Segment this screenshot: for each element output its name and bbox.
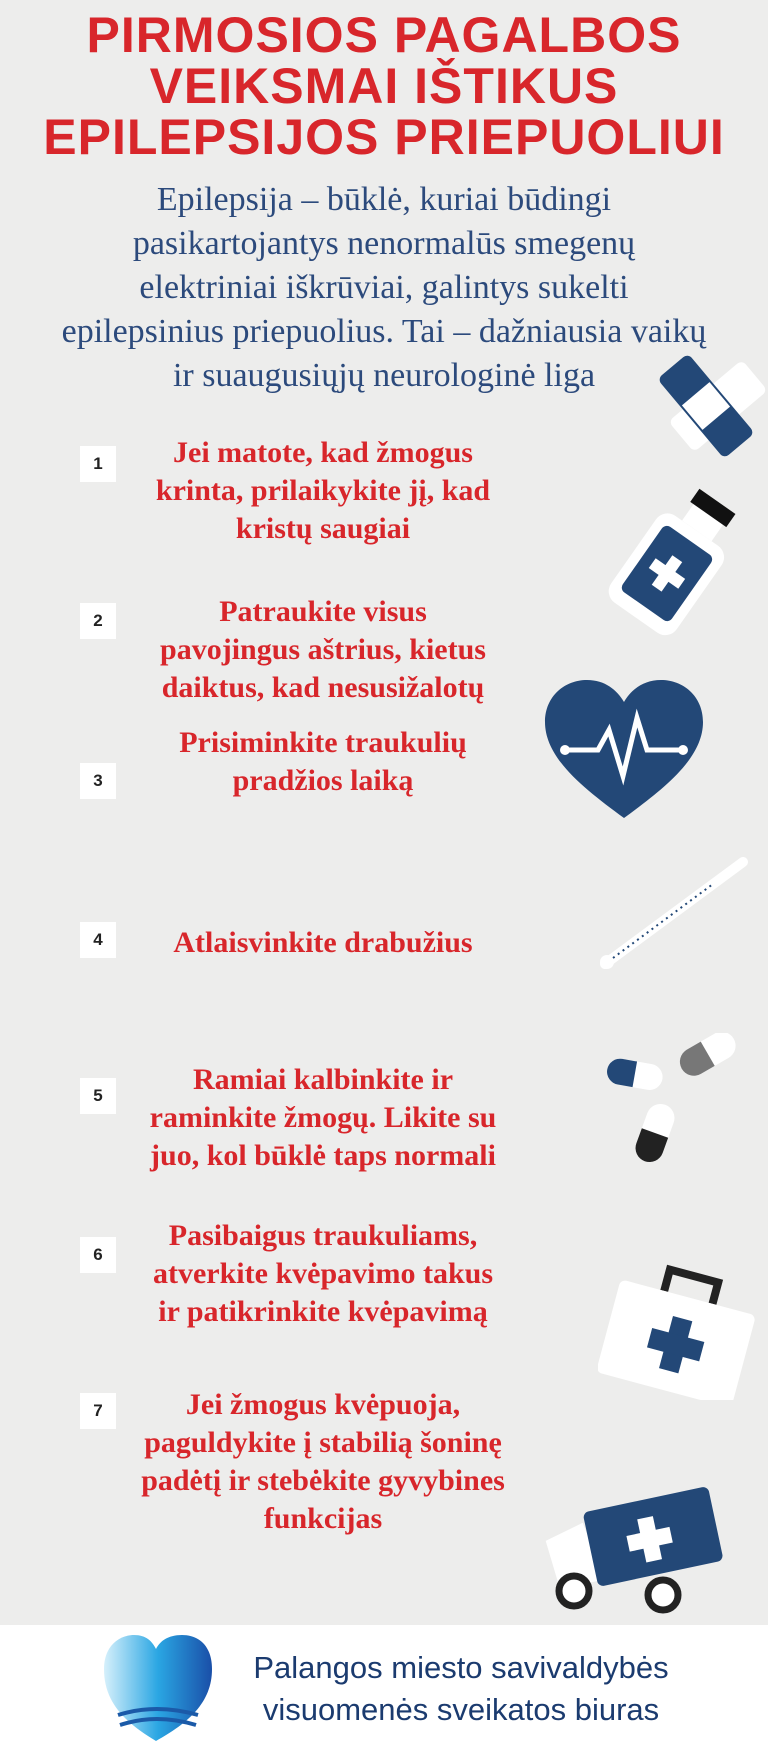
- organisation name: [253, 1650, 669, 1727]
- step 7 text: funkcijas: [264, 1502, 382, 1535]
- step 1: 1: [93, 454, 103, 473]
- intro text: [62, 181, 706, 394]
- step 5 text: Ramiai kalbinkite ir: [193, 1063, 453, 1096]
- step 5 text: juo, kol būklė taps normali: [150, 1139, 496, 1172]
- icon: pills: [607, 1033, 736, 1162]
- step 1 text: Jei matote, kad žmogus: [173, 436, 473, 469]
- title: PIRMOSIOS PAGALBOS: [87, 7, 681, 63]
- step 4 text: Atlaisvinkite drabužius: [173, 926, 473, 959]
- step 2 text: [160, 595, 486, 704]
- step 3: 3: [93, 771, 103, 790]
- intro text: ir suaugusiųjų neurologinė liga: [173, 357, 595, 394]
- icon: first aid kit: [598, 1264, 754, 1400]
- step 6: 6: [93, 1245, 103, 1264]
- step 6 text: atverkite kvėpavimo takus: [153, 1257, 493, 1290]
- step 5 text: raminkite žmogų. Likite su: [150, 1101, 496, 1134]
- title: [43, 7, 725, 165]
- step 2 text: Patraukite visus: [219, 595, 427, 628]
- step 6 text: [153, 1219, 493, 1328]
- step 1: [80, 446, 116, 482]
- step 2: 2: [93, 611, 103, 630]
- title: VEIKSMAI IŠTIKUS: [150, 58, 618, 114]
- step 3 text: pradžios laiką: [233, 764, 413, 797]
- organisation name: Palangos miesto savivaldybės: [253, 1650, 669, 1685]
- step 2: [80, 603, 116, 639]
- icon: bandage: [660, 356, 765, 456]
- step 5 text: [150, 1063, 496, 1172]
- step 7 text: Jei žmogus kvėpuoja,: [186, 1388, 460, 1421]
- step 1 text: [156, 436, 490, 545]
- step 6 text: Pasibaigus traukuliams,: [169, 1219, 477, 1252]
- step 7 text: padėtį ir stebėkite gyvybines: [141, 1464, 505, 1497]
- step 7 text: [141, 1388, 505, 1535]
- icon: medicine bottle: [608, 488, 736, 635]
- step 4: [80, 922, 116, 958]
- organisation name: visuomenės sveikatos biuras: [263, 1692, 659, 1727]
- step 6: [80, 1237, 116, 1273]
- step 7: 7: [93, 1401, 103, 1420]
- intro text: epilepsinius priepuolius. Tai – dažniausia vaikų: [62, 313, 706, 350]
- intro text: Epilepsija – būklė, kuriai būdingi: [157, 181, 611, 218]
- step 3 text: Prisiminkite traukulių: [179, 726, 467, 759]
- icon: ambulance: [546, 1487, 722, 1614]
- step 7 text: paguldykite į stabilią šoninę: [144, 1426, 502, 1459]
- step 5: [80, 1078, 116, 1114]
- icon: heart with pulse: [544, 680, 703, 818]
- step 4: 4: [93, 930, 103, 949]
- intro text: pasikartojantys nenormalūs smegenų: [133, 225, 635, 262]
- step 1 text: kristų saugiai: [236, 512, 410, 545]
- step 2 text: pavojingus aštrius, kietus: [160, 633, 486, 666]
- icon: thermometer: [600, 857, 748, 969]
- step 1 text: krinta, prilaikykite jį, kad: [156, 474, 490, 507]
- step 7: [80, 1393, 116, 1429]
- step 3 text: [179, 726, 467, 797]
- logo heart: [104, 1635, 212, 1741]
- step 6 text: ir patikrinkite kvėpavimą: [158, 1295, 488, 1328]
- step 2 text: daiktus, kad nesusižalotų: [162, 671, 484, 704]
- step 3: [80, 763, 116, 799]
- step 5: 5: [93, 1086, 103, 1105]
- footer: [0, 1625, 768, 1745]
- title: EPILEPSIJOS PRIEPUOLIUI: [43, 109, 725, 165]
- intro text: elektriniai iškrūviai, galintys sukelti: [139, 269, 629, 306]
